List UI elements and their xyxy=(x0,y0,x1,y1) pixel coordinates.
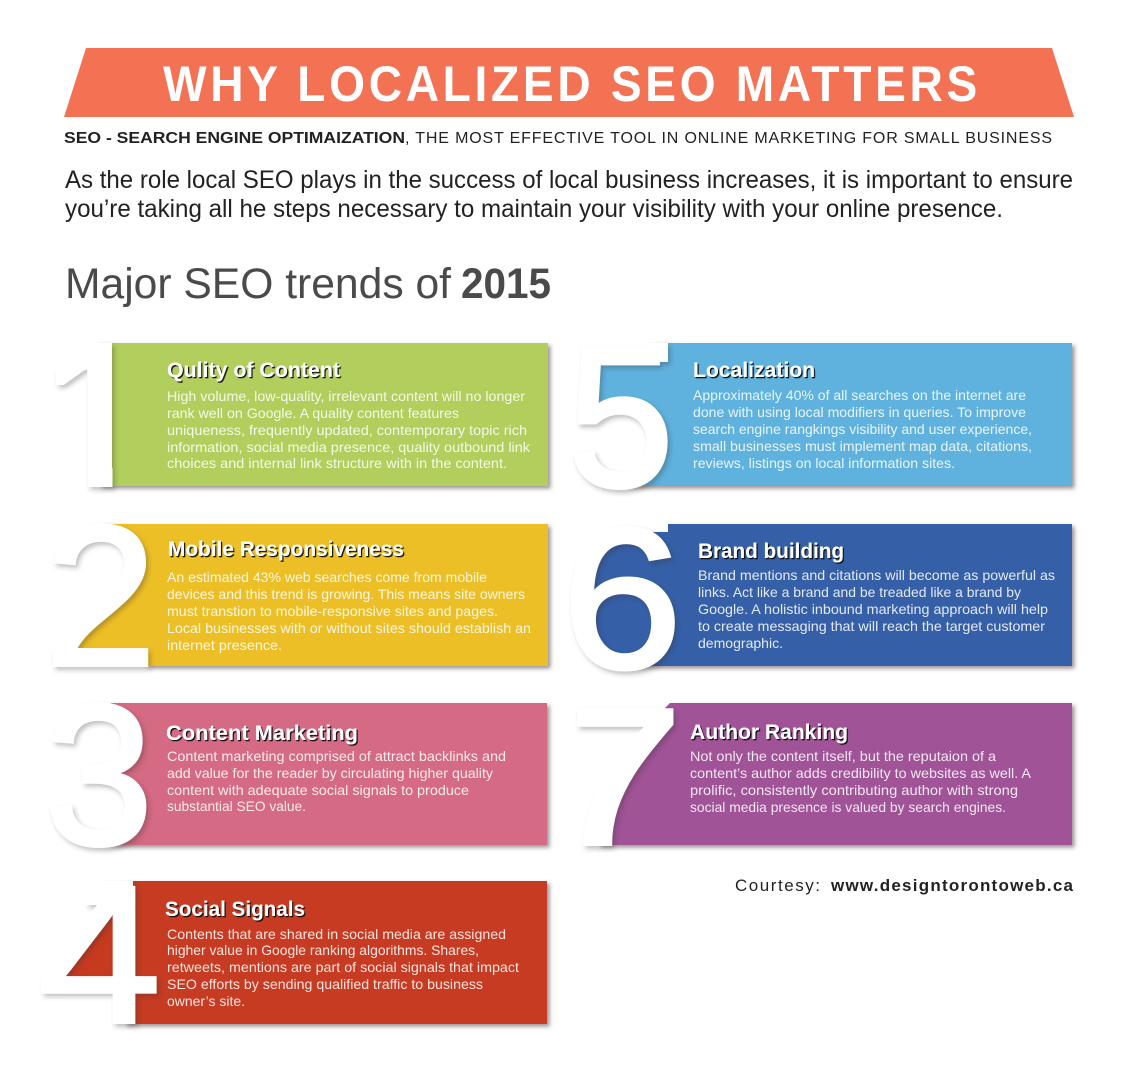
section heading: 2015 xyxy=(461,260,551,308)
body text: choices and internal link structure with in the content. xyxy=(167,455,507,471)
body text: owner’s site. xyxy=(167,993,245,1009)
panel: 3 content marketing xyxy=(45,663,547,887)
subtitle xyxy=(64,130,1052,147)
body text: Local businesses with or without sites should establish an xyxy=(167,620,531,636)
body text: SEO efforts by sending qualified traffic to business xyxy=(167,976,483,992)
body text xyxy=(167,388,531,471)
body text: devices and this trend is growing. This means site owners xyxy=(167,586,525,602)
body text: Brand mentions and citations will become as powerful as xyxy=(698,567,1055,583)
panel: 4 social signals xyxy=(38,847,547,1064)
body text xyxy=(167,926,519,1009)
body text: Contents that are shared in social media are assigned xyxy=(167,926,506,942)
number 4: 4 xyxy=(38,847,161,1064)
body text: An estimated 43% web searches come from mobile xyxy=(167,569,487,585)
body text: uniqueness, frequently updated, contemporary topic rich xyxy=(167,422,527,438)
body text: social media presence is valued by search engines. xyxy=(690,799,1006,815)
body text: Content marketing comprised of attract backlinks and xyxy=(167,748,506,764)
body text xyxy=(690,748,1032,815)
heading: Brand building xyxy=(698,540,844,563)
heading: Social Signals xyxy=(165,898,305,921)
panel: 1 quality of content xyxy=(56,342,554,493)
number 5: 5 xyxy=(568,306,674,529)
body text: done with using local modifiers in queries. To improve xyxy=(693,404,1026,420)
body text xyxy=(693,387,1032,471)
body text: content’s author adds credibility to websites as well. A xyxy=(690,765,1032,781)
intro text xyxy=(65,166,1073,223)
number 7: 7 xyxy=(539,668,684,887)
courtesy credit: www.designtorontoweb.ca xyxy=(830,876,1074,895)
body text: content with adequate social signals to produce xyxy=(167,782,469,798)
panel: 5 localization xyxy=(574,342,1078,496)
title banner: WHY LOCALIZED SEO MATTERS xyxy=(163,56,981,112)
body text: internet presence. xyxy=(167,637,282,653)
body text: rank well on Google. A quality content features xyxy=(167,405,459,421)
body text: reviews, listings on local information sites. xyxy=(693,455,955,471)
heading: Author Ranking xyxy=(690,721,848,744)
body text xyxy=(698,567,1055,651)
body text: small businesses must implement map data, citations, xyxy=(693,438,1032,454)
heading: Mobile Responsiveness xyxy=(168,538,404,561)
intro text: you’re taking all he steps necessary to maintain your visibility with your online presence. xyxy=(65,195,1003,223)
panel: 7 author ranking xyxy=(576,702,1078,852)
body text: Approximately 40% of all searches on the internet are xyxy=(693,387,1026,403)
body text: links. Act like a brand and be treaded like a brand by xyxy=(698,584,1021,600)
body text: demographic. xyxy=(698,635,783,651)
number 1 xyxy=(56,343,118,493)
body text: retweets, mentions are part of social signals that impact xyxy=(167,959,519,975)
heading: Content Marketing xyxy=(166,722,358,745)
body text: prolific, consistently contributing author with strong xyxy=(690,782,1018,798)
number 1: 1 xyxy=(39,305,150,528)
body text xyxy=(167,748,506,814)
heading: Qulity of Content xyxy=(167,359,340,382)
panel: 6 brand building xyxy=(562,488,1072,711)
body text: information, social media presence, quality outbound link xyxy=(167,439,531,455)
body text: High volume, low-quality, irrelevant content will no longer xyxy=(167,388,525,404)
number 6: 6 xyxy=(562,488,682,711)
heading: Localization xyxy=(693,359,815,382)
subtitle: SEO - SEARCH ENGINE OPTIMAIZATION xyxy=(64,130,405,147)
number 5 xyxy=(574,343,673,496)
panel: 2 mobile responsiveness xyxy=(45,485,548,708)
section heading: Major SEO trends of xyxy=(65,260,452,308)
subtitle: , THE MOST EFFECTIVE TOOL IN ONLINE MARKETING FOR SMALL BUSINESS xyxy=(405,130,1052,147)
body text: Not only the content itself, but the reputaion of a xyxy=(690,748,996,764)
body text: higher value in Google ranking algorithms. Shares, xyxy=(167,942,479,958)
courtesy credit: Courtesy: xyxy=(735,876,820,895)
body text: to create messaging that will reach the target customer xyxy=(698,618,1045,634)
body text: Google. A holistic inbound marketing approach will help xyxy=(698,601,1048,617)
body text xyxy=(167,569,531,653)
intro text: As the role local SEO plays in the success of local business increases, it is important to ensure xyxy=(65,166,1073,194)
body text: substantial SEO value. xyxy=(167,798,306,814)
body text: add value for the reader by circulating higher quality xyxy=(167,765,493,781)
number 3: 3 xyxy=(45,663,153,887)
number 2: 2 xyxy=(45,485,156,708)
body text: must transtion to mobile-responsive sites and pages. xyxy=(167,603,498,619)
body text: search engine rangkings visibility and user experience, xyxy=(693,421,1032,437)
